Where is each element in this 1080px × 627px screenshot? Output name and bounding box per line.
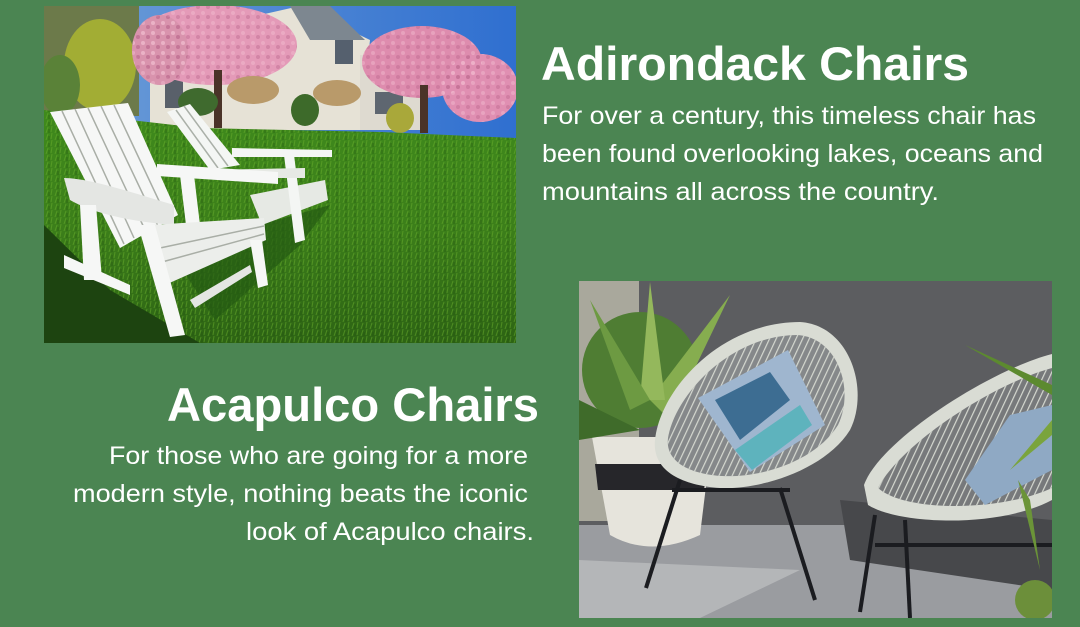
heading: Acapulco Chairs: Acapulco Chairs <box>167 378 539 431</box>
text block: Acapulco description <box>73 442 534 546</box>
text block: Adirondack description <box>542 102 1043 206</box>
lawn <box>44 110 516 343</box>
left trees <box>40 6 139 116</box>
planter and plant <box>579 282 730 546</box>
text block: Adirondack description: For over a century, this timeless chair has <box>542 102 1036 130</box>
house <box>150 6 420 130</box>
text block: Adirondack description: mountains all across the country. <box>542 178 939 206</box>
heading: Adirondack Chairs: Adirondack Chairs <box>541 37 969 90</box>
front chair <box>50 103 278 337</box>
text block: Acapulco description: look of Acapulco chairs. <box>246 518 534 546</box>
text block: Adirondack description: been found overlooking lakes, oceans and <box>542 140 1043 168</box>
cherry trees <box>132 5 518 133</box>
left chair <box>646 320 860 600</box>
text block: Acapulco description: modern style, nothing beats the iconic <box>73 480 528 508</box>
text block: Acapulco description: For those who are going for a more <box>109 442 528 470</box>
photo: white Adirondack chairs on a lawn <box>40 5 518 343</box>
back chair <box>167 104 332 243</box>
foreground plant <box>965 345 1055 620</box>
photo: Acapulco chairs on a patio <box>579 281 1060 620</box>
right chair <box>860 354 1060 618</box>
